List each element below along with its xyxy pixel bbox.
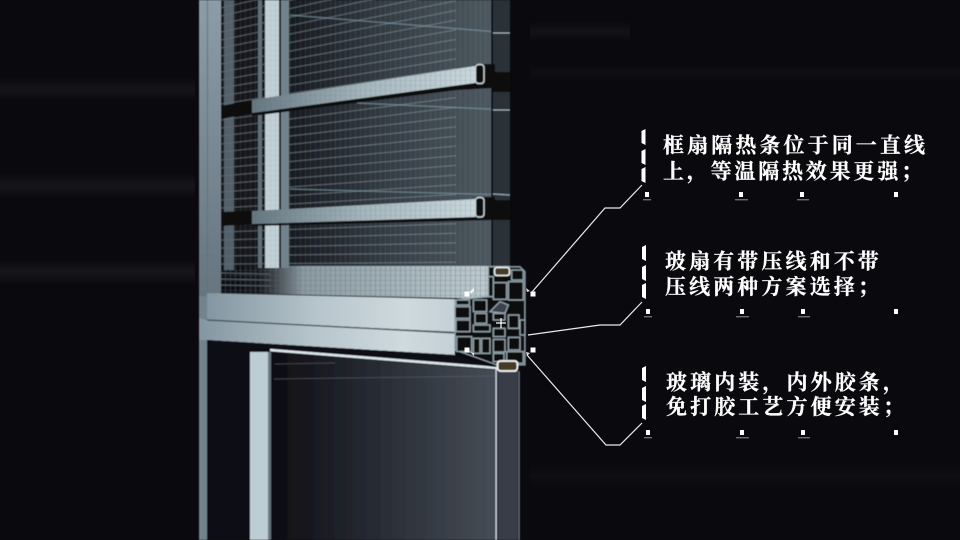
marker: bottom-right square [526, 348, 536, 356]
left frame post [199, 0, 221, 540]
upper mesh panel [221, 0, 510, 270]
light lower mesh band [221, 266, 493, 299]
capsule gasket top [494, 268, 510, 276]
lower interior and post [207, 340, 497, 540]
marker: top-left square [464, 288, 474, 296]
marker: top-right square [526, 288, 536, 296]
vertical mullions [224, 0, 289, 270]
segmented bar 3 [642, 366, 646, 420]
frame cross-section profile [455, 267, 525, 365]
callout text 3 line 2: 免打胶工艺方便安装； [666, 395, 907, 419]
lower glass panel [270, 350, 520, 540]
callout text 3: 玻璃内装，内外胶条， [666, 370, 907, 396]
callout text 1: 框扇隔热条位于同一直线 [663, 134, 928, 158]
section markers [464, 288, 536, 356]
callout 2 [642, 245, 882, 299]
horizontal rail 1 [221, 64, 495, 119]
tick markers 2 [644, 309, 898, 317]
callout 3 [642, 366, 907, 420]
leader line 2 [528, 302, 642, 335]
frame faces [199, 293, 455, 355]
segmented bar 1 [642, 129, 646, 183]
horizontal rail 2 [221, 197, 495, 226]
marker: centre cross [496, 318, 506, 328]
tick markers 3 [644, 430, 898, 438]
callout text 2 line 2: 压线两种方案选择； [665, 275, 882, 299]
capsule gasket bottom [498, 361, 518, 371]
marker: bottom-left square [464, 348, 474, 356]
right column [491, 0, 510, 266]
leader line 1 [532, 185, 642, 292]
segmented bar 2 [642, 245, 646, 299]
callout text 2: 玻扇有带压线和不带 [665, 250, 882, 274]
callout 1 [642, 129, 928, 183]
window illustration [199, 0, 525, 540]
callout text 1 line 2: 上，等温隔热效果更强； [663, 160, 925, 184]
tick markers 1 [643, 192, 898, 200]
leader line 3 [527, 355, 642, 445]
